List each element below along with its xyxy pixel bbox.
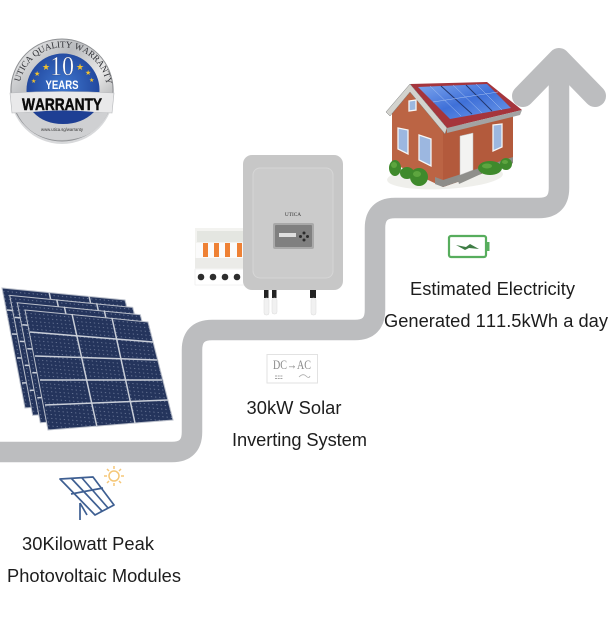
inverter unit [243,155,343,290]
stars: ★ [85,69,91,77]
label: modules [7,533,181,586]
icon: solar panel and sun [60,466,124,520]
label: modules: Photovoltaic Modules [7,565,181,586]
warranty badge: www.utica.sg/warranty [41,127,84,132]
ten: 10 [50,51,74,81]
stars: ★ [76,62,84,72]
ribbon [10,92,114,113]
bushes [389,158,512,186]
icon: DC to AC [267,354,318,383]
walls [392,92,513,187]
breaker box [195,228,245,285]
label: inverter: 30kW Solar [246,397,342,418]
stars: ★ [34,70,40,78]
door [460,133,473,175]
stars: ★ [31,78,36,85]
inverter cables [264,290,316,315]
warranty badge [10,38,114,144]
label: modules: 30Kilowatt Peak [22,533,155,554]
flow arrow path [0,59,595,452]
stars: ★ [89,77,94,84]
stars: ★ [42,62,50,72]
label: estimated electricity [384,278,609,331]
sun [104,466,124,486]
label: estimated electricity: Generated 111.5kWh a day [384,310,609,331]
badge arc text [20,47,106,82]
panel [60,477,114,520]
warranty badge: WARRANTY [22,95,103,114]
icon: DC to AC: DC→AC [273,357,311,372]
windows [398,100,502,166]
icon: battery [449,236,490,257]
years: YEARS [46,78,78,92]
brand: UTICA [285,212,301,218]
warranty badge: UTICA QUALITY WARRANTY [14,41,112,84]
house [386,82,522,192]
label: estimated electricity: Estimated Electricity [410,278,576,299]
label: inverter: Inverting System [232,429,367,450]
stars [31,62,94,85]
label: inverter [232,397,367,450]
roof [410,82,522,128]
ground [386,162,504,192]
solar panel array [2,288,173,430]
control panel [273,223,314,249]
